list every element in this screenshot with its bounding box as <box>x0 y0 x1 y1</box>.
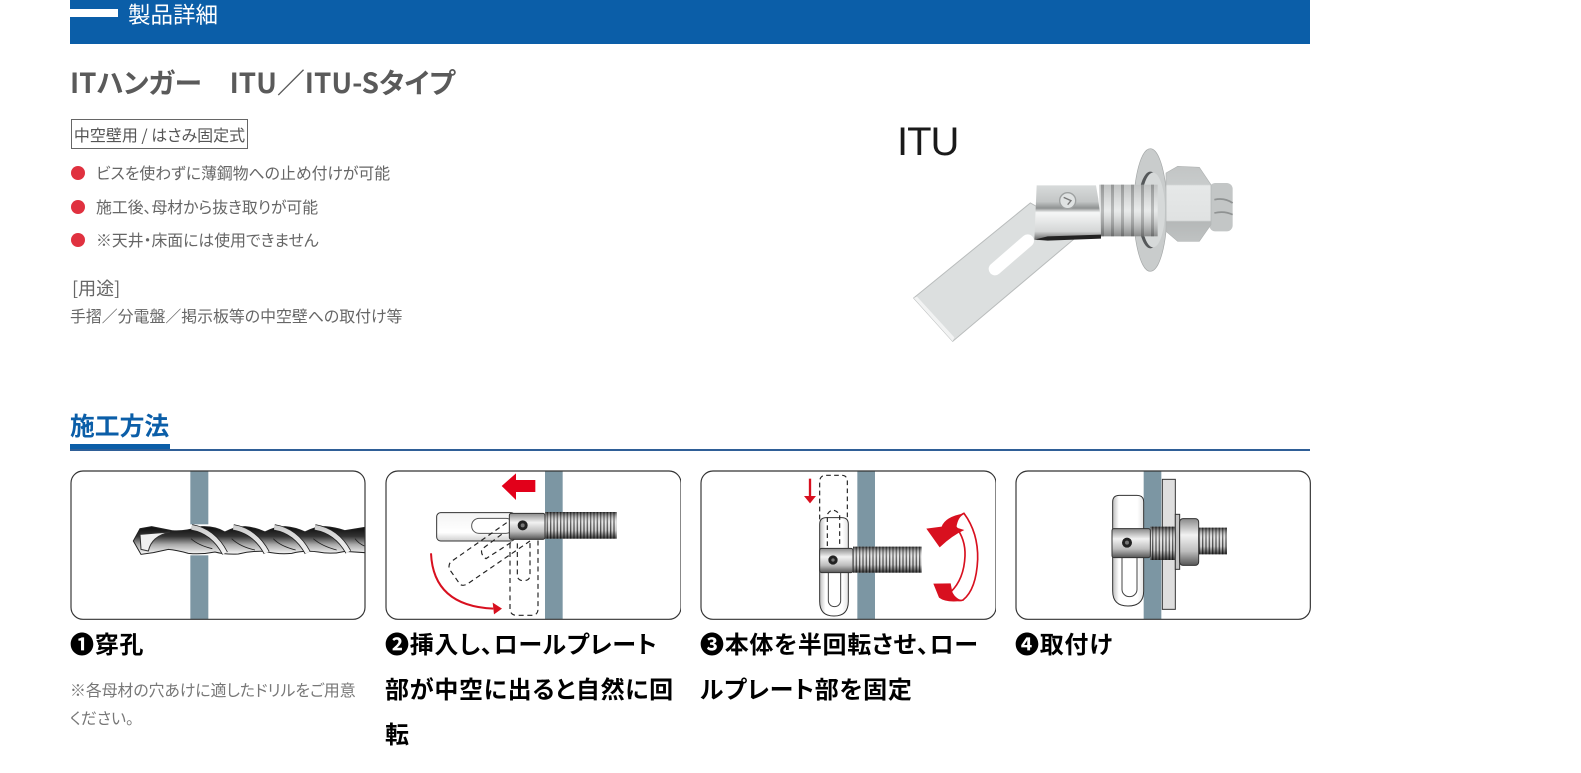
diagram: drilling <box>70 470 366 620</box>
heading: step 3 <box>700 625 979 705</box>
heading: step 2: ❷挿入し、ロールプレート <box>385 625 657 660</box>
panel: step 3 <box>700 470 996 705</box>
bullet 3 <box>71 233 85 247</box>
washer <box>1134 149 1167 271</box>
product label ITU: ITU <box>897 120 958 164</box>
section underline <box>70 444 1310 451</box>
note: step 1 <box>70 678 356 729</box>
nut <box>1166 166 1211 241</box>
bullet 2 <box>71 200 85 214</box>
usage text: 手摺／分電盤／掲示板等の中空壁への取付け等 <box>70 304 402 327</box>
feature list <box>71 161 390 251</box>
section heading: 施工方法: 施工方法 <box>70 407 169 443</box>
note: step 1: ください。 <box>70 706 134 729</box>
diagram: fastening <box>1015 470 1311 620</box>
feature 1: ビスを使わずに薄鋼物への止め付けが可能 <box>96 161 390 184</box>
feature 2: 施工後、母材から抜き取りが可能 <box>96 195 318 218</box>
heading: step 4: ❹取付け <box>1015 625 1113 660</box>
barrel <box>1034 185 1101 241</box>
diagram: insertion <box>385 470 681 620</box>
header dash <box>70 9 118 17</box>
panel: step 2 <box>385 470 681 750</box>
heading: step 3: ルプレート部を固定 <box>700 670 913 705</box>
usage label: [用途] <box>72 275 120 301</box>
threaded stud <box>1099 183 1233 236</box>
product photo: ITU anchor <box>913 148 1233 342</box>
heading: step 2: 転 <box>385 715 410 750</box>
plate <box>914 203 1076 341</box>
feature 3: ※天井・床面には使用できません <box>96 228 319 251</box>
heading: step 1: ❶穿孔 <box>70 625 144 660</box>
note: step 1: ※各母材の穴あけに適したドリルをご用意 <box>70 678 356 701</box>
heading: step 2: 部が中空に出ると自然に回 <box>385 670 674 705</box>
diagram: half rotation <box>700 470 996 620</box>
header bar <box>70 0 1310 44</box>
bullet 1 <box>71 166 85 180</box>
panel: step 1 <box>70 470 366 729</box>
heading: step 2 <box>385 625 674 750</box>
type tag: 中空壁用 / はさみ固定式 <box>74 122 245 146</box>
heading: step 3: ❸本体を半回転させ、ロー <box>700 625 979 660</box>
product title: ITハンガー ITU／ITU-Sタイプ <box>70 62 455 102</box>
panel: step 4 <box>1015 470 1311 660</box>
